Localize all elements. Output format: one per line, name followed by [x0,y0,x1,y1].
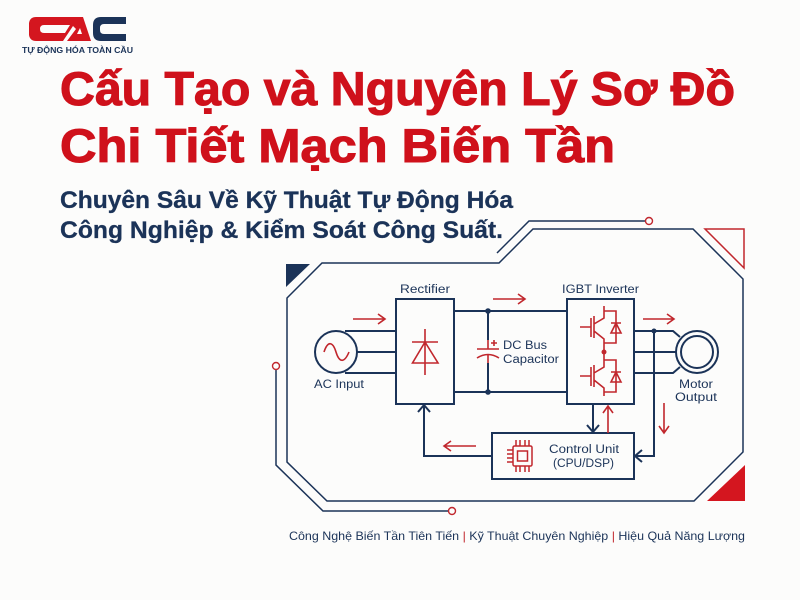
footer tagline: Công Nghệ Biến Tần Tiên Tiến | Kỹ Thuật Chuyên Nghiệp | Hiệu Quả Năng Lượng [289,529,745,543]
icon: diode [412,329,438,375]
corner: red outline triangle [705,229,744,268]
control unit block: (CPU/DSP) [553,458,614,470]
corner: red solid triangle [707,465,745,501]
control unit block: Control Unit [549,444,620,456]
logo: GAC [22,17,133,55]
IGBT inverter block: IGBT Inverter [562,284,639,296]
trace: left-bottom with red node [272,362,456,514]
rectifier block [396,284,454,404]
subtitle: Chuyên Sâu Về Kỹ Thuật Tự Động Hóa [60,187,513,214]
subtitle: Công Nghiệp & Kiểm Soát Công Suất. [60,217,503,244]
DC bus with capacitor [454,308,567,395]
panel: circuit frame [272,218,745,514]
subtitle [60,187,513,244]
AC input source [314,331,396,391]
motor output: Output [675,392,718,404]
title [60,62,735,172]
motor output [634,328,718,404]
rectifier block: Rectifier [400,284,450,296]
icon: lower IGBT [580,352,621,396]
DC bus with capacitor: Capacitor [503,354,559,366]
red flow arrows [353,294,674,451]
icon: chip [507,440,532,472]
title: Chi Tiết Mạch Biến Tần [60,119,615,172]
title: Cấu Tạo và Nguyên Lý Sơ Đồ [60,62,735,115]
icon: capacitor [477,340,499,363]
IGBT inverter block [562,284,639,404]
feedback wiring [418,331,654,462]
trace: top with red node [497,218,652,253]
motor output: Motor [679,379,713,391]
logo: GAC: TỰ ĐỘNG HÓA TOÀN CẦU [22,44,133,55]
control unit block [492,433,634,479]
AC input source: AC Input [314,379,365,391]
corner: navy triangle [286,264,310,287]
icon: upper IGBT [580,306,621,352]
DC bus with capacitor: DC Bus [503,340,547,352]
